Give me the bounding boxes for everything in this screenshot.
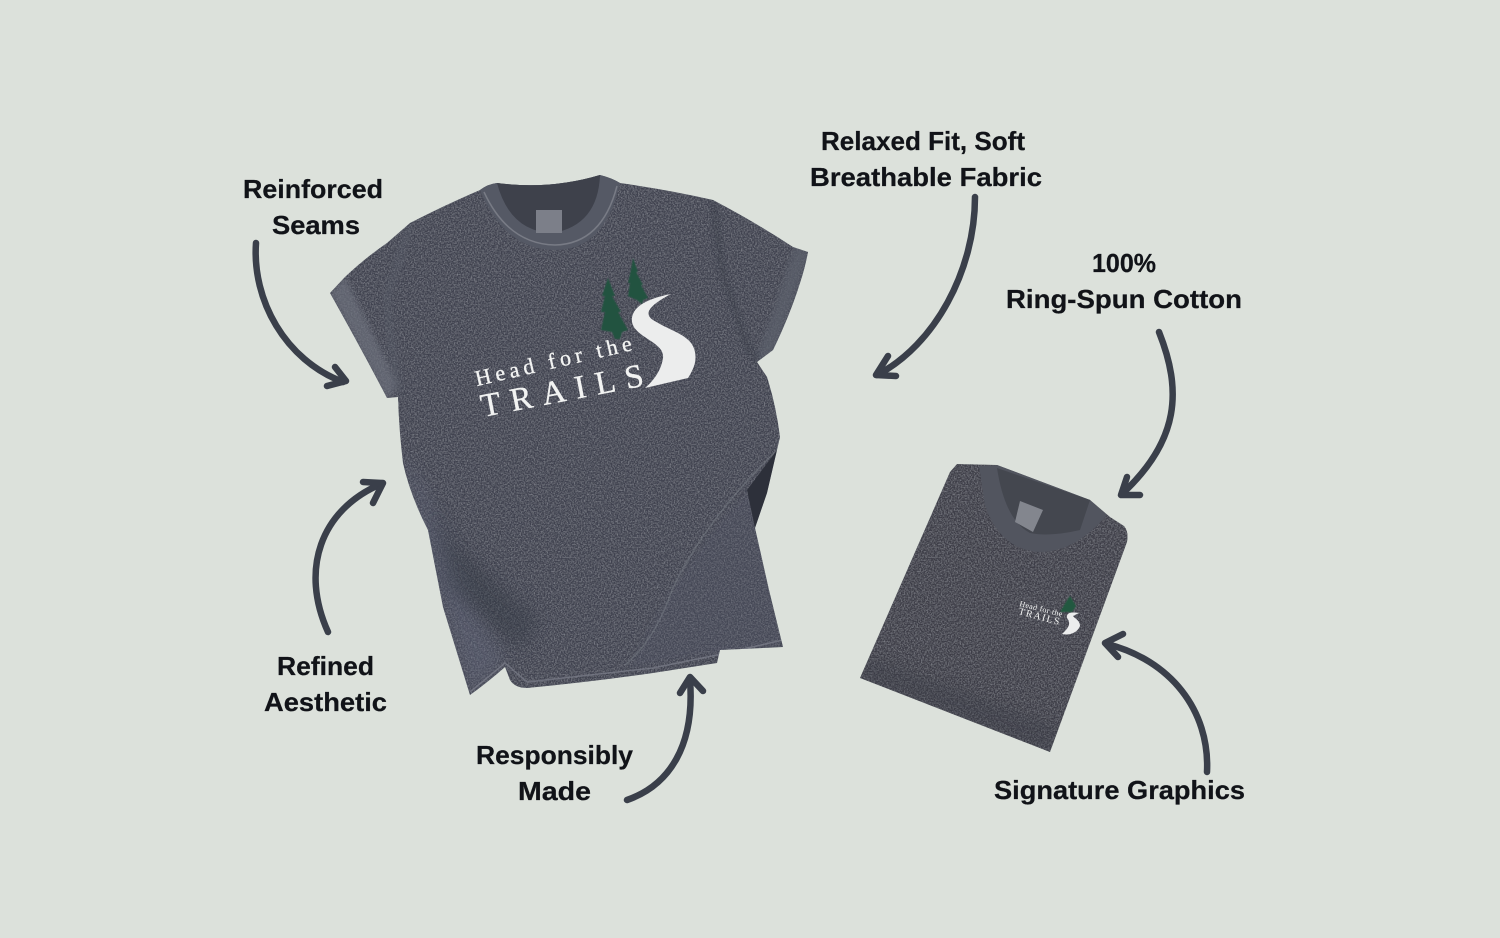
logo: folded: TRAILS bbox=[1017, 606, 1061, 628]
slogan: Head for the bbox=[473, 331, 634, 391]
label: Responsibly Made: Responsibly bbox=[476, 740, 634, 770]
label: 100% Ring-Spun Cotton bbox=[1006, 248, 1242, 314]
logo: flat lay: TRAILS bbox=[478, 358, 646, 425]
trees bbox=[601, 258, 648, 339]
label: Relaxed Fit, Soft Breathable Fabric bbox=[810, 126, 1042, 192]
arrow: Relaxed Fit bbox=[876, 197, 975, 376]
label: Relaxed Fit, Soft Breathable Fabric: Breathable Fabric bbox=[810, 162, 1042, 192]
arrow: Refined Aesthetic bbox=[316, 482, 383, 632]
label: 100% Ring-Spun Cotton: 100% bbox=[1092, 248, 1156, 278]
t-shirt: folded bbox=[860, 464, 1128, 752]
arrow: 100% Ring-Spun Cotton bbox=[1121, 332, 1173, 495]
label: 100% Ring-Spun Cotton: Ring-Spun Cotton bbox=[1006, 284, 1242, 314]
collar: flat lay bbox=[480, 175, 620, 250]
arrow: Reinforced Seams bbox=[256, 243, 346, 386]
logo: folded bbox=[1017, 596, 1080, 635]
label: Responsibly Made: Made bbox=[518, 776, 591, 806]
neck tag: folded bbox=[1015, 501, 1043, 532]
arrow: Responsibly Made bbox=[627, 677, 703, 800]
road bbox=[632, 294, 696, 388]
label: Responsibly Made bbox=[476, 740, 634, 806]
collar: folded bbox=[979, 465, 1107, 552]
logo: flat lay bbox=[473, 258, 696, 425]
label: Reinforced Seams bbox=[243, 174, 383, 240]
label: Refined Aesthetic bbox=[264, 651, 387, 717]
arrow: Signature Graphics bbox=[1105, 634, 1207, 772]
t-shirt: flat lay bbox=[330, 175, 810, 695]
label: Reinforced Seams: Seams bbox=[272, 210, 360, 240]
logo: folded: Head for the bbox=[1019, 599, 1064, 619]
label: Refined Aesthetic: Aesthetic bbox=[264, 687, 387, 717]
label: Refined Aesthetic: Refined bbox=[277, 651, 374, 681]
label: Relaxed Fit, Soft Breathable Fabric: Relaxed Fit, Soft bbox=[821, 126, 1025, 156]
label: Reinforced Seams: Reinforced bbox=[243, 174, 383, 204]
label: Signature Graphics: Signature Graphics bbox=[994, 775, 1245, 805]
neck tag: flat lay bbox=[536, 210, 562, 233]
